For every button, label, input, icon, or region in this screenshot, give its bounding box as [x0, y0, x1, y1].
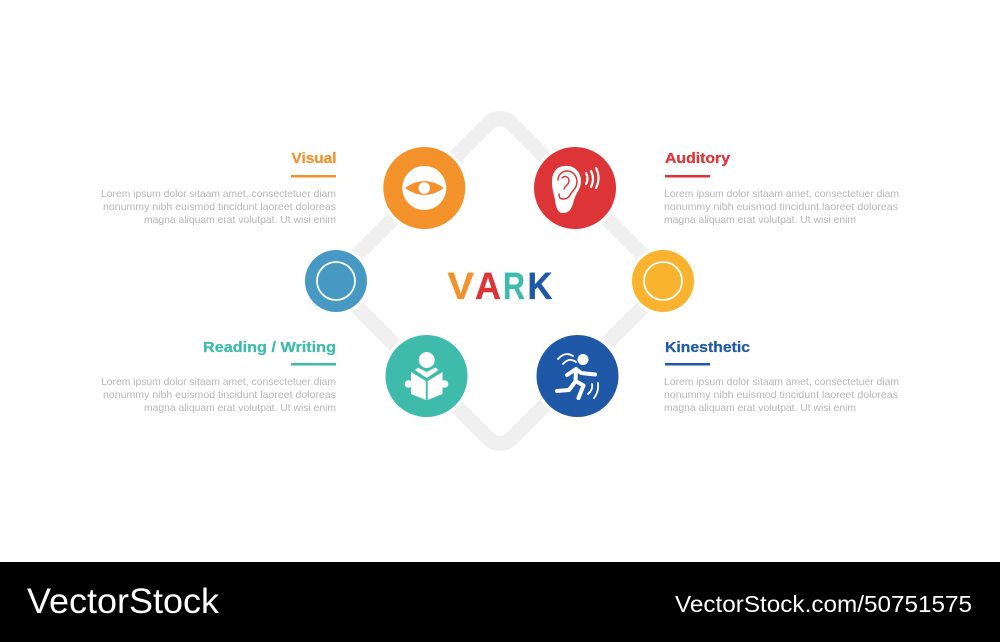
text block: Kinesthetic: Lorem ipsum dolor sitaam amet, consectetuer diam [664, 376, 899, 388]
icon: kinesthetic runner [534, 332, 622, 420]
text block: Visual: Lorem ipsum dolor sitaam amet, consectetuer diam [101, 188, 336, 200]
node: left blue circle [302, 247, 370, 315]
text block: Reading / Writing: Lorem ipsum dolor sitaam amet, consectetuer diam [101, 376, 336, 388]
footer bar: VectorStock.com/50751575 [675, 591, 972, 617]
text block: Auditory: magna aliquam erat volutpat. Ut wisi enim [664, 214, 856, 226]
text block: Visual: Visual [292, 150, 336, 167]
text block: Kinesthetic: magna aliquam erat volutpat. Ut wisi enim [664, 402, 856, 414]
text block: Auditory: Lorem ipsum dolor sitaam amet, consectetuer diam [664, 188, 899, 200]
text block: Reading / Writing: nonummy nibh euismod tincidunt laoreet doloreas [103, 389, 336, 401]
text block: Visual [101, 150, 336, 226]
footer bar [0, 562, 1000, 642]
text block: Reading / Writing: Reading / Writing [203, 339, 336, 356]
icon: visual eye [380, 144, 468, 232]
center title: VARK: V [448, 266, 475, 308]
center title: VARK [448, 266, 553, 308]
center title: VARK: R [503, 266, 525, 308]
text block: Auditory [664, 150, 899, 226]
text block: Kinesthetic [664, 339, 899, 414]
text block: Reading / Writing: magna aliquam erat volutpat. Ut wisi enim [144, 402, 336, 414]
node: right yellow circle [629, 247, 697, 315]
text block: Auditory: nonummy nibh euismod tincidunt laoreet doloreas [664, 201, 898, 213]
icon: auditory ear [531, 144, 619, 232]
text block: Visual: nonummy nibh euismod tincidunt laoreet doloreas [103, 201, 336, 213]
text block: Reading / Writing [101, 339, 336, 414]
icon: reading book [382, 332, 470, 420]
center title: VARK: A [475, 266, 501, 308]
text block: Visual: magna aliquam erat volutpat. Ut wisi enim [144, 214, 336, 226]
diamond connector [338, 119, 662, 443]
center title: VARK: K [528, 266, 553, 308]
text block: Auditory: Auditory [665, 150, 731, 167]
text block: Kinesthetic: nonummy nibh euismod tincidunt laoreet doloreas [664, 389, 898, 401]
text block: Kinesthetic: Kinesthetic [665, 339, 750, 356]
footer bar: VectorStock [27, 582, 220, 621]
